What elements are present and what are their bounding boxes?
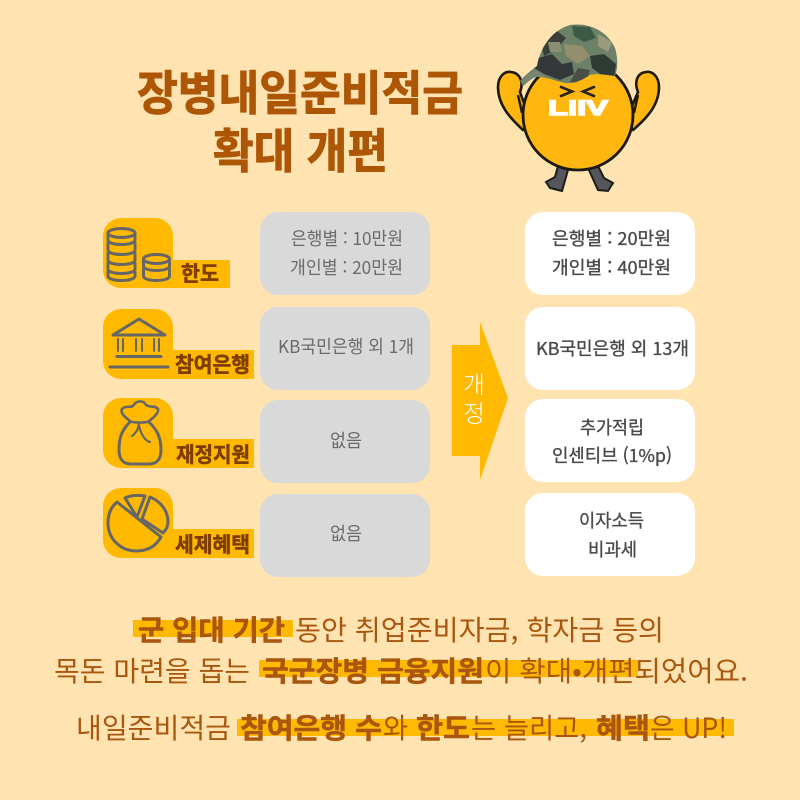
panel: before, banks: KB국민은행 외 1개	[278, 333, 414, 359]
panel: after, banks	[525, 307, 695, 390]
icon: Liiv mascot wearing camouflage cap: LIIV	[548, 97, 608, 120]
row icon: coins, 한도	[103, 218, 230, 288]
text block: summary line 3: 는 늘리고,	[471, 707, 587, 747]
text block: summary line 3: 참여은행 수	[240, 707, 382, 747]
row icon: money bag, 재정지원: 재정지원	[176, 439, 250, 469]
arrow: 개정: 개	[463, 365, 485, 400]
row icon: bank, 참여은행: 참여은행	[175, 349, 250, 379]
text block: summary line 3: 한도	[416, 707, 470, 747]
panel: after, banks: KB국민은행 외 13개	[536, 335, 689, 361]
text block: summary line 1: 동안 취업준비자금, 학자금 등의	[295, 609, 664, 649]
panel: before, support	[260, 400, 430, 483]
title: 확대 개편	[213, 113, 388, 182]
panel: before, tax: 없음	[330, 520, 362, 546]
text block: summary line 3: 와	[383, 707, 408, 747]
panel: after, limit: 은행별 : 20만원	[552, 225, 671, 251]
panel: after, support: 추가적립	[580, 414, 644, 440]
row icon: pie chart, 세제혜택: 세제혜택	[175, 529, 250, 559]
panel: before, limit: 개인별 : 20만원	[290, 254, 403, 280]
row icon: pie chart, 세제혜택	[103, 488, 254, 559]
panel: before, tax	[260, 494, 430, 577]
panel: after, support: 인센티브 (1%p)	[552, 442, 672, 468]
icon: Liiv mascot wearing camouflage cap	[498, 20, 659, 191]
text block: summary line 1	[133, 609, 664, 649]
text block: summary line 3: 내일준비적금	[76, 707, 231, 747]
panel: after, limit: 개인별 : 40만원	[552, 254, 671, 280]
panel: after, tax	[525, 493, 695, 576]
arrow: 개정	[452, 322, 508, 480]
panel: after, tax: 이자소득	[579, 507, 644, 533]
title: 장병내일준비적금	[137, 55, 463, 124]
row icon: coins, 한도: 한도	[181, 258, 219, 288]
arrow: 개정: 정	[463, 394, 485, 429]
text block: summary line 2	[54, 650, 748, 690]
panel: before, banks	[260, 307, 430, 390]
text block: summary line 1: 군 입대 기간	[138, 609, 285, 649]
panel: before, limit: 은행별 : 10만원	[291, 225, 403, 251]
panel: before, support: 없음	[330, 427, 362, 453]
text block: summary line 3	[76, 707, 734, 747]
text block: summary line 3: 혜택	[596, 707, 650, 747]
text block: summary line 3: 은 UP!	[650, 707, 727, 747]
text block: summary line 2: 국군장병 금융지원	[262, 650, 484, 690]
row icon: bank, 참여은행	[103, 309, 254, 379]
panel: after, limit	[525, 212, 695, 295]
text block: summary line 2: 목돈 마련을 돕는	[54, 650, 250, 690]
title	[137, 55, 463, 182]
row icon: money bag, 재정지원	[103, 398, 254, 469]
panel: after, support	[525, 399, 695, 482]
panel: before, limit	[260, 212, 430, 295]
panel: after, tax: 비과세	[588, 536, 637, 562]
text block: summary line 2: 이 확대•개편되었어요.	[485, 650, 748, 690]
